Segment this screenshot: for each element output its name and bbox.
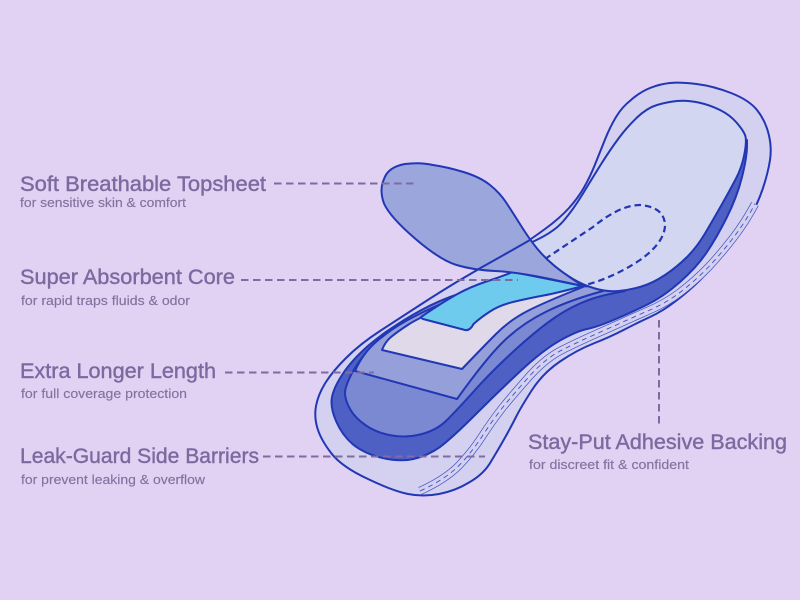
leak guard dark band xyxy=(332,140,747,460)
dashed core outline xyxy=(545,205,665,285)
outer pad backing xyxy=(315,83,771,496)
white liner layer xyxy=(382,285,583,369)
outer edge through flap xyxy=(475,240,530,271)
callout: adhesive backing: for discreet fit & confident xyxy=(529,457,689,472)
mid blue layer xyxy=(345,286,625,436)
callout: topsheet: Soft Breathable Topsheet xyxy=(20,173,266,196)
callout: adhesive backing: Stay-Put Adhesive Backing xyxy=(528,431,787,454)
pad illustration xyxy=(315,83,771,496)
callout: side barriers xyxy=(20,445,485,487)
callout: longer length: for full coverage protection xyxy=(21,386,187,401)
callout: longer length xyxy=(20,360,374,401)
callout: topsheet xyxy=(20,173,417,210)
adhesive stitching xyxy=(420,204,755,491)
topsheet xyxy=(530,101,746,291)
callout: side barriers: Leak-Guard Side Barriers xyxy=(20,445,259,468)
callout: side barriers: for prevent leaking & overflow xyxy=(21,472,206,487)
absorbent core xyxy=(421,272,583,330)
extra length light layer xyxy=(355,286,615,399)
callout: absorbent core: Super Absorbent Core xyxy=(20,266,235,289)
callout: topsheet: for sensitive skin & comfort xyxy=(20,195,186,210)
callout: longer length: Extra Longer Length xyxy=(20,360,216,383)
callout: absorbent core: for rapid traps fluids & odor xyxy=(21,293,191,308)
folded topsheet flap xyxy=(382,163,583,286)
callout: adhesive backing xyxy=(528,320,787,472)
callout: absorbent core xyxy=(20,266,518,308)
